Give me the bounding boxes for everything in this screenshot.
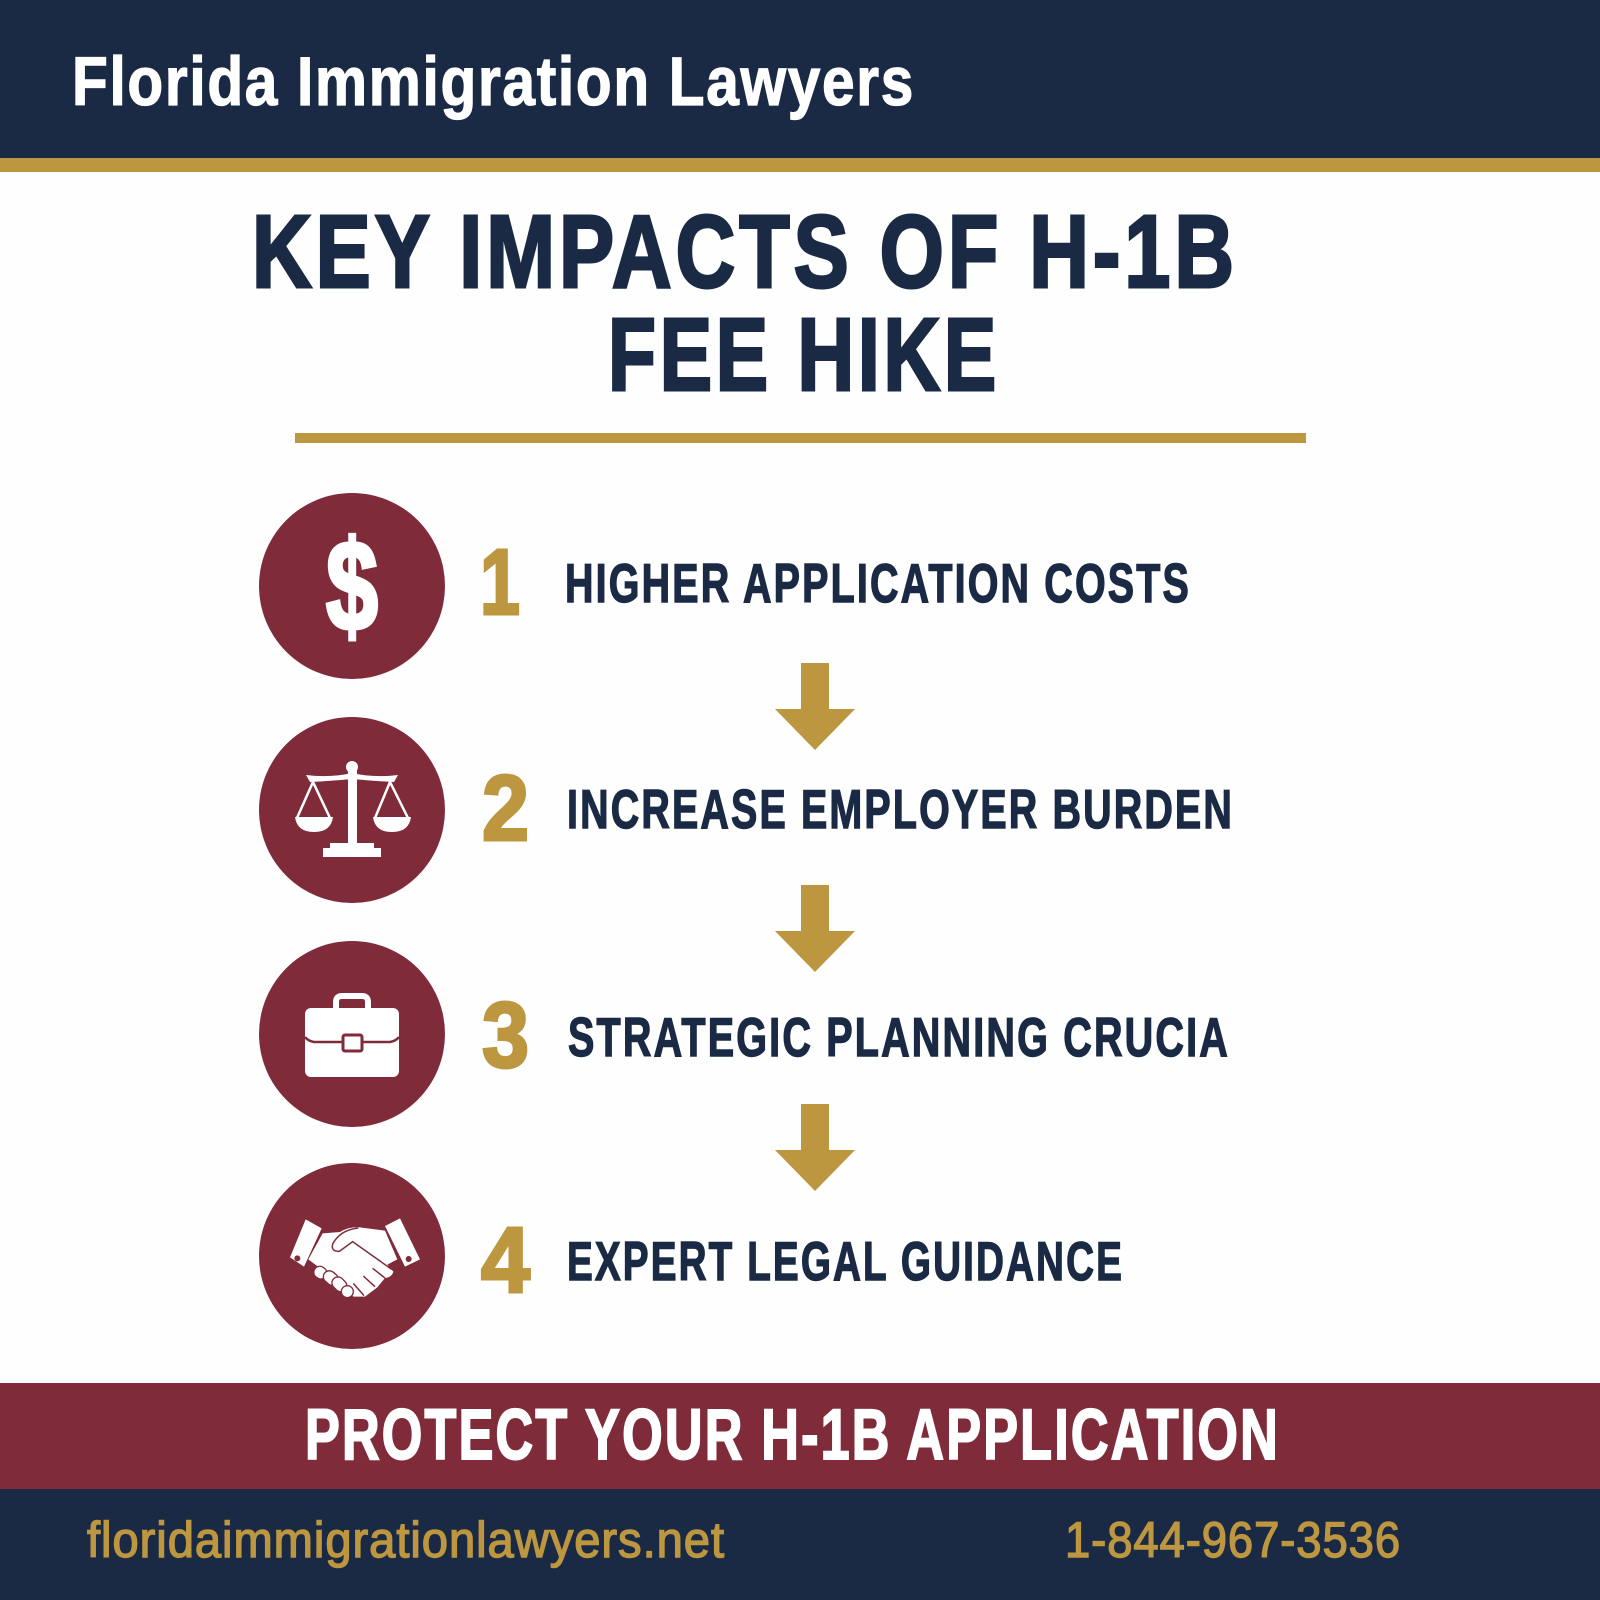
label 3: STRATEGIC PLANNING CRUCIA (568, 1006, 1230, 1068)
step 4: expert legal guidance (259, 1163, 1124, 1349)
arrow 2 (775, 885, 855, 972)
number 2: 2 (482, 756, 529, 860)
icon: briefcase (259, 941, 445, 1127)
title: FEE HIKE (608, 297, 1000, 412)
website: floridaimmigrationlawyers.net (87, 1512, 725, 1568)
label 2: INCREASE EMPLOYER BURDEN (567, 778, 1234, 840)
header band (0, 0, 1600, 172)
title: KEY IMPACTS OF H-1B (252, 194, 1238, 309)
title (252, 194, 1238, 412)
call to action band (0, 1383, 1600, 1489)
icon: dollar sign (259, 493, 445, 679)
footer band (0, 1489, 1600, 1600)
label 1: HIGHER APPLICATION COSTS (565, 552, 1191, 614)
number 3: 3 (482, 983, 529, 1087)
label 4: EXPERT LEGAL GUIDANCE (567, 1230, 1124, 1292)
number 4: 4 (481, 1208, 530, 1312)
phone: 1-844-967-3536 (1065, 1512, 1401, 1568)
call to action band: PROTECT YOUR H-1B APPLICATION (305, 1396, 1280, 1475)
step 3: strategic planning (259, 941, 1230, 1127)
firm name: Florida Immigration Lawyers (72, 43, 915, 120)
step 2: increase employer burden (259, 717, 1234, 903)
icon: handshake (259, 1163, 445, 1349)
arrow 3 (775, 1104, 855, 1191)
icon: dollar sign: $ (326, 515, 378, 658)
icon: scales of justice (259, 717, 445, 903)
arrow 1 (775, 663, 855, 750)
step 1: higher application costs (259, 493, 1191, 679)
number 1: 1 (480, 530, 520, 634)
title divider (295, 433, 1306, 443)
